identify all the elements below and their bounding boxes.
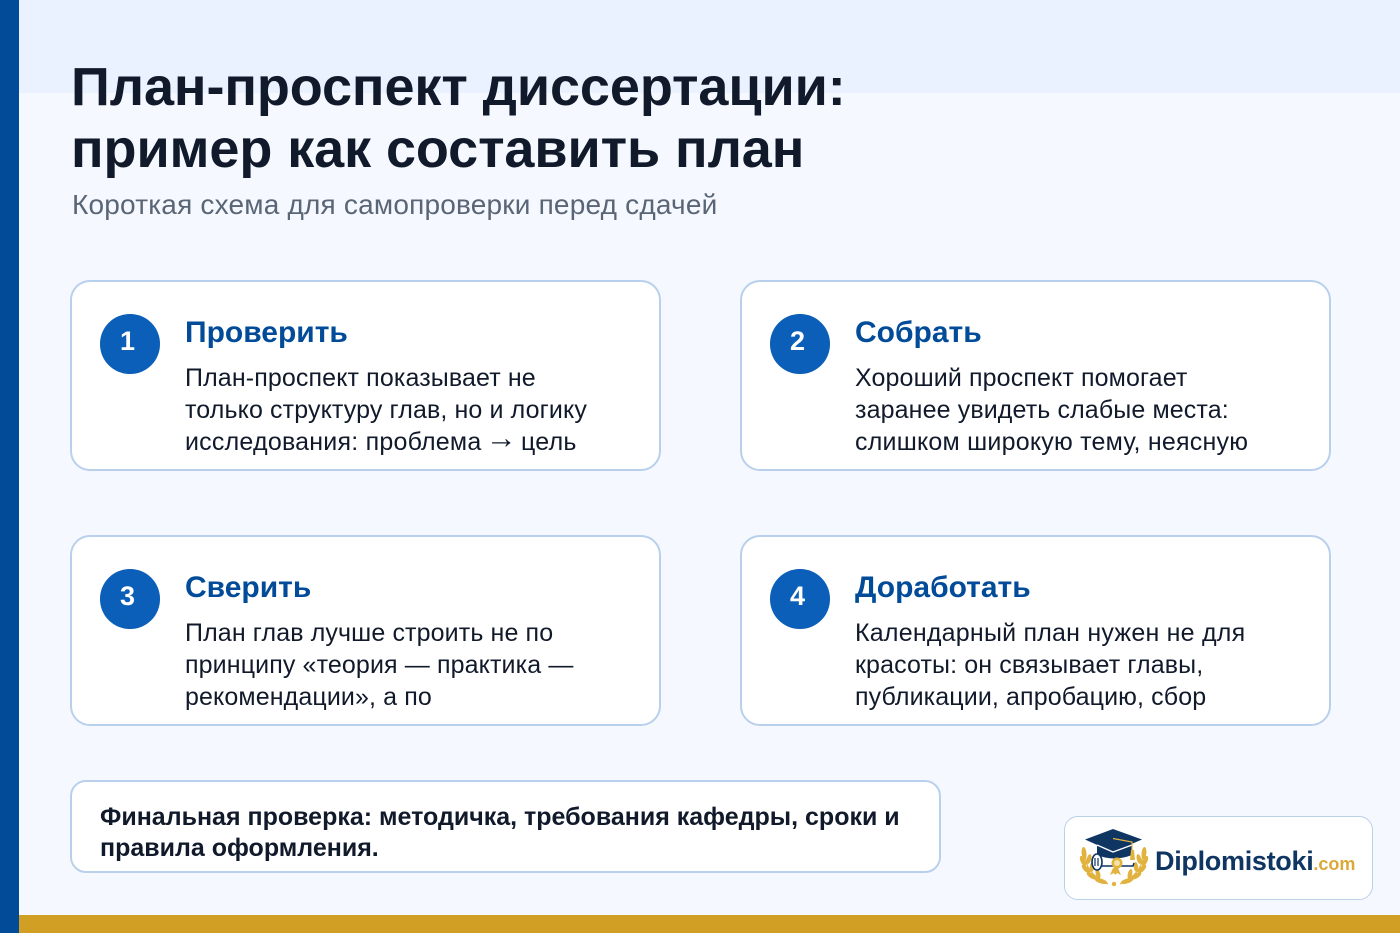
callout: final check: Финальная проверка: методичка, требования кафедры, сроки и bbox=[100, 803, 900, 831]
text: step 2: заранее увидеть слабые места: bbox=[855, 396, 1229, 424]
text: step 2: Хороший проспект помогает bbox=[855, 364, 1187, 392]
bottom accent bar bbox=[19, 915, 1400, 933]
title bbox=[71, 57, 846, 179]
title: План-проспект диссертации: bbox=[71, 57, 846, 117]
step number 2: 2 bbox=[790, 326, 805, 356]
text: step 1: исследования: проблема → цель bbox=[185, 420, 577, 456]
callout: final check bbox=[70, 780, 941, 873]
text: step 3: рекомендации», а по bbox=[185, 683, 432, 711]
text: step 1: План-проспект показывает не bbox=[185, 364, 536, 392]
step number 3 bbox=[100, 569, 160, 628]
text: step 3: План глав лучше строить не по bbox=[185, 619, 553, 647]
panel: step 2 bbox=[740, 280, 1331, 471]
subtitle: Короткая схема для самопроверки перед сдачей bbox=[72, 189, 717, 220]
logo card bbox=[1064, 816, 1373, 900]
heading: Собрать: Собрать bbox=[855, 316, 982, 349]
step number 1: 1 bbox=[120, 326, 135, 356]
title: пример как составить план bbox=[71, 119, 804, 179]
logo wordmark: Diplomistoki.com bbox=[1155, 846, 1355, 876]
text: step 1: только структуру глав, но и логику bbox=[185, 396, 587, 424]
panel: step 1 bbox=[70, 280, 661, 471]
panel: step 3 bbox=[70, 535, 661, 726]
text: step 3 bbox=[185, 619, 574, 711]
text: step 4: публикации, апробацию, сбор bbox=[855, 683, 1206, 711]
text: step 4: красоты: он связывает главы, bbox=[855, 651, 1203, 679]
text: step 2: слишком широкую тему, неясную bbox=[855, 428, 1248, 456]
text: step 4 bbox=[855, 619, 1245, 711]
text: step 4: Календарный план нужен не для bbox=[855, 619, 1245, 647]
step number 2 bbox=[770, 314, 830, 374]
step number 4 bbox=[770, 569, 830, 628]
text: step 3: принципу «теория — практика — bbox=[185, 651, 573, 679]
text: step 2 bbox=[855, 364, 1248, 456]
callout: final check: правила оформления. bbox=[100, 834, 379, 862]
step number 1 bbox=[100, 314, 160, 374]
heading: Проверить: Проверить bbox=[185, 316, 348, 349]
header band bbox=[19, 0, 1400, 93]
step number 3: 3 bbox=[120, 581, 135, 611]
heading: Сверить: Сверить bbox=[185, 571, 311, 604]
panel: step 4 bbox=[740, 535, 1331, 726]
heading: Доработать: Доработать bbox=[855, 571, 1031, 604]
logo: graduation cap and laurel bbox=[1080, 829, 1148, 886]
left accent bar bbox=[0, 0, 19, 933]
text: step 1 bbox=[185, 364, 587, 456]
step number 4: 4 bbox=[790, 581, 805, 611]
